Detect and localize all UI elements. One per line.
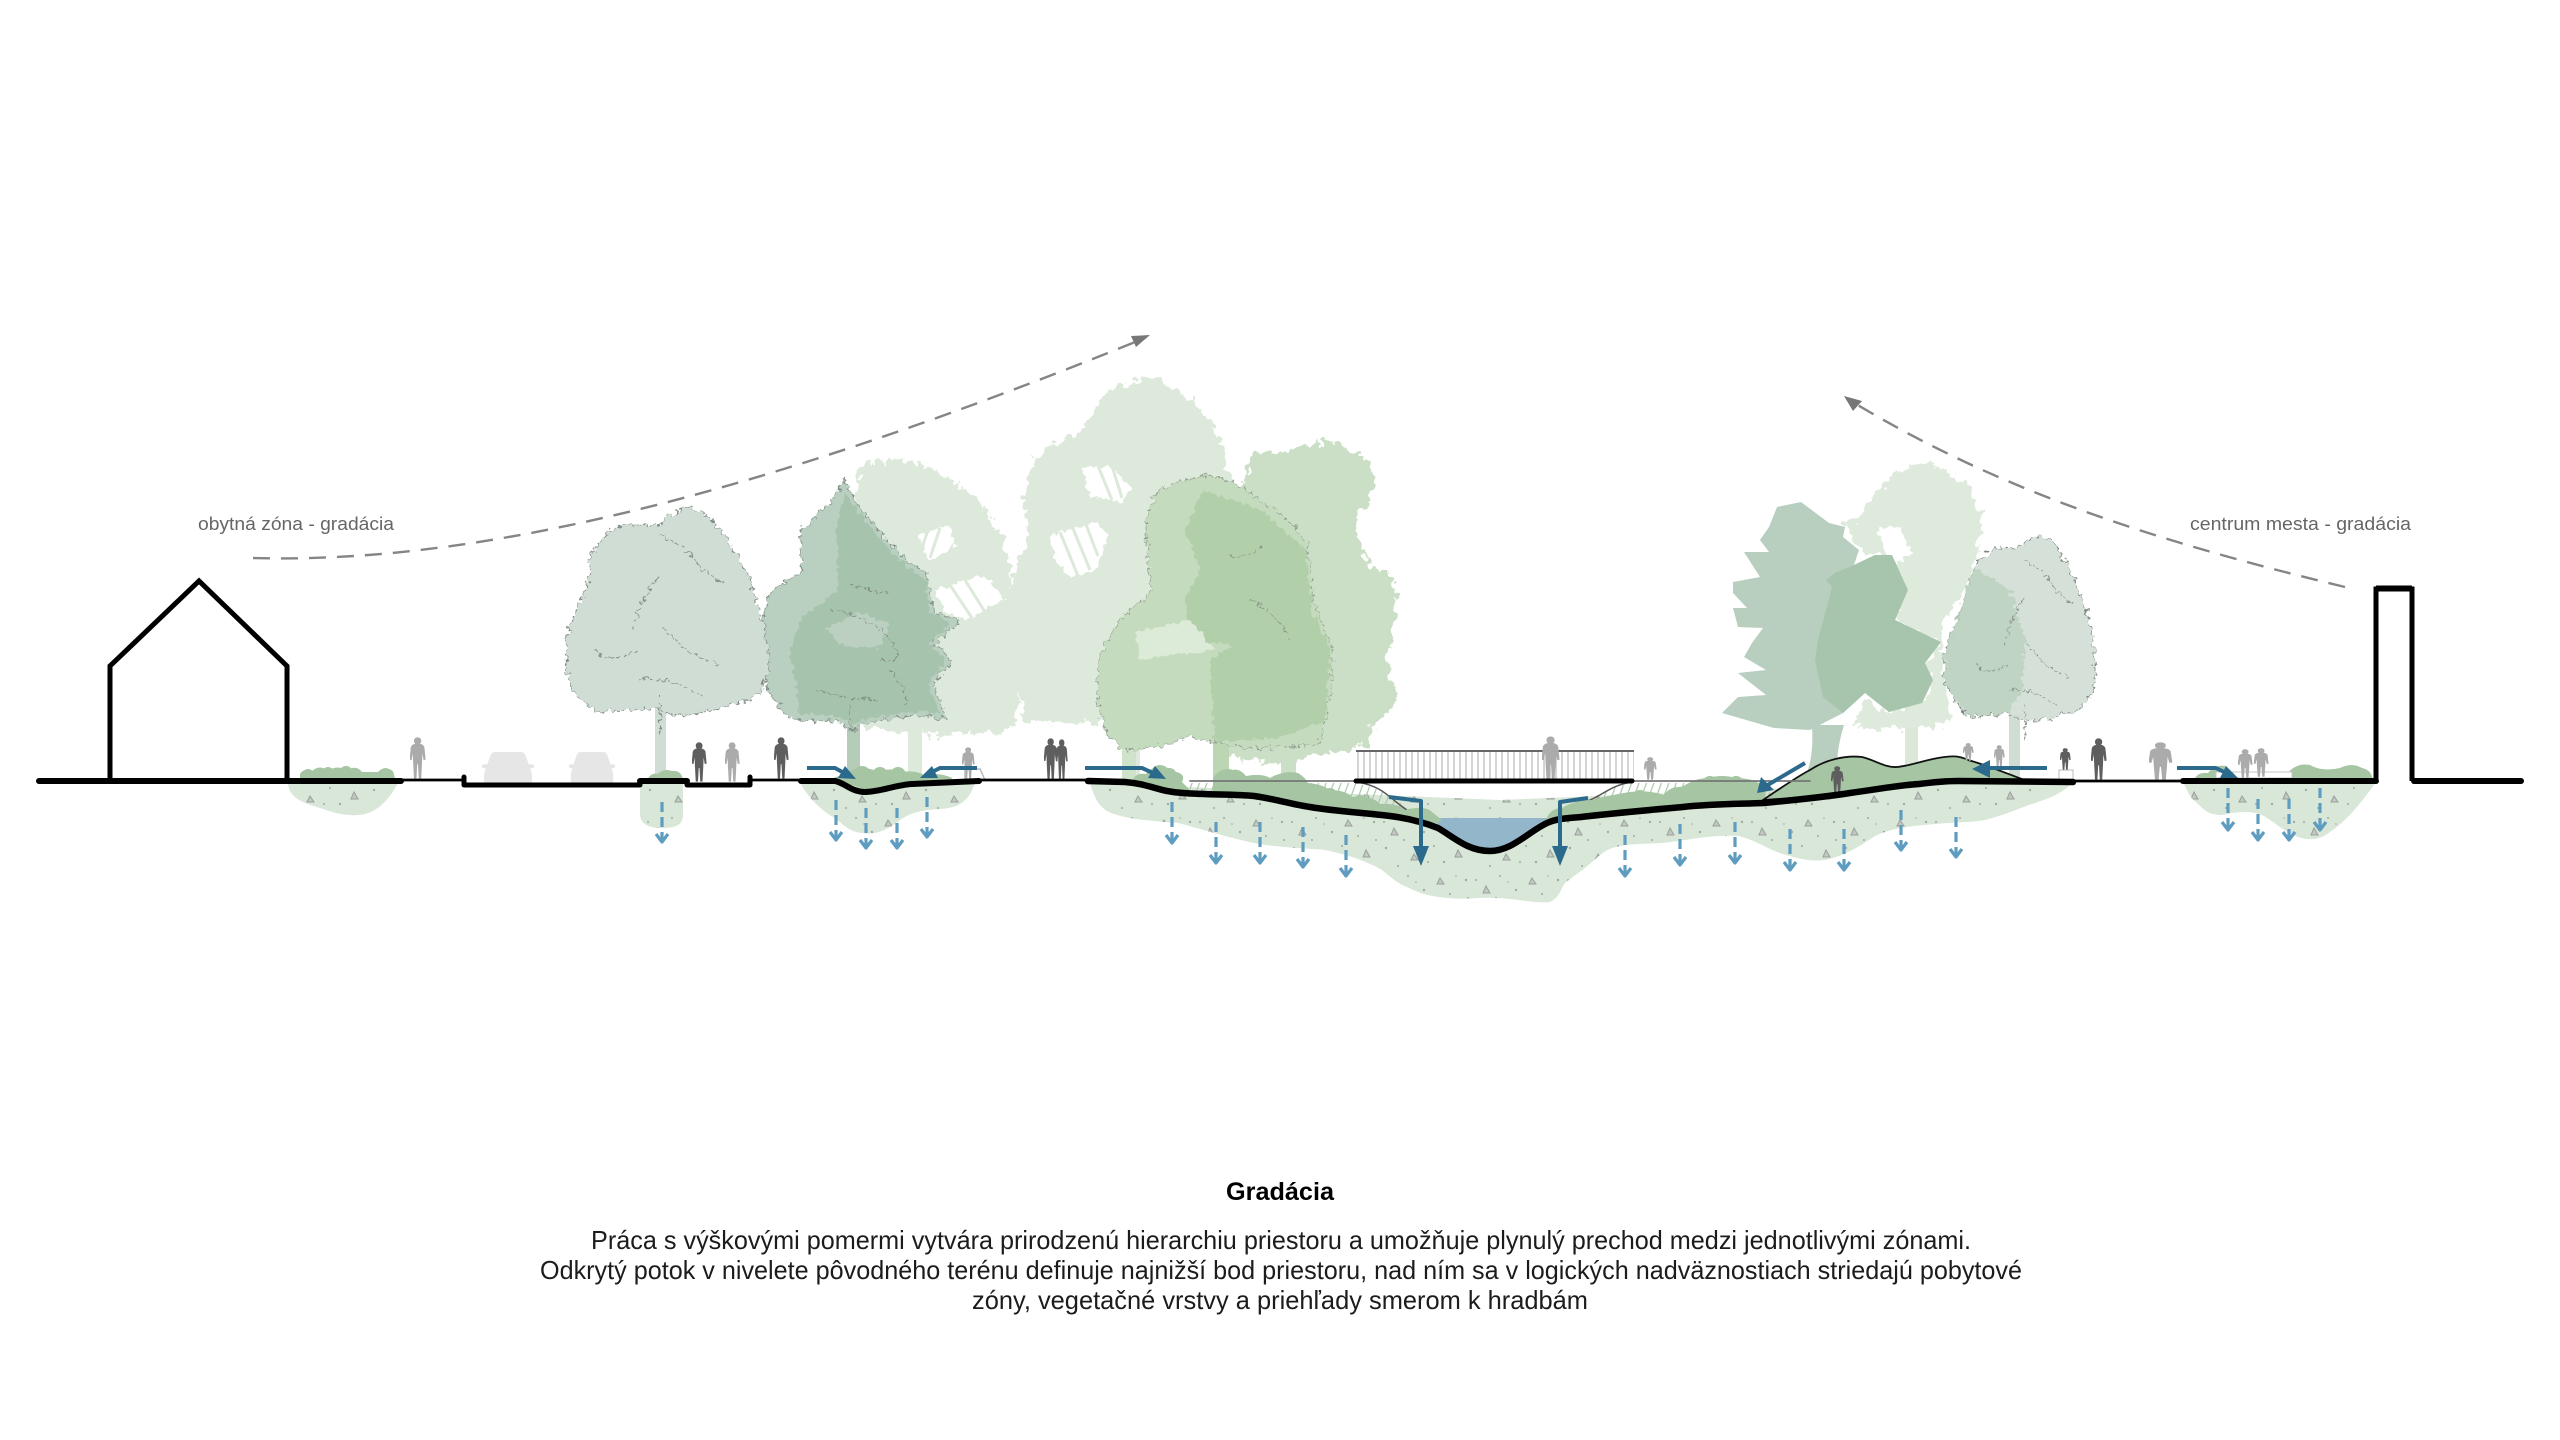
heading: Gradácia [1226,1178,1335,1206]
tree: front scalloped green tree [1097,475,1332,781]
body text [540,1225,2022,1315]
tree: light back tree behind conifer [850,459,1020,781]
house outline [110,581,287,781]
tree: street tree left [566,508,769,781]
stream water [1436,818,1548,851]
infiltration arrows [656,788,2326,876]
body text: Odkrytý potok v nivelete pôvodného terénu definuje najnižší bod priestoru, nad ním sa v logických nadväznostiach striedajú pobytové [540,1255,2022,1285]
city wall outline [2376,589,2412,781]
tree: grey-green conifer [764,480,959,781]
ground line [39,777,2521,851]
soil texture: gravel and pebbles [288,781,2376,902]
cars [482,752,615,783]
people: dark figures [692,737,2107,794]
plinth and bench [2059,770,2292,780]
vegetation: hedges and bushes [300,764,2373,826]
tree: darker crown part of maple [1815,555,1941,713]
soil: swale [800,782,975,834]
gradient arc left [253,335,1150,558]
tree: maple-like grey-green tree right [1722,502,1941,775]
tree: light back tree right [1845,463,1982,770]
hatched bank fill [1190,783,1770,815]
bench chair [965,769,985,780]
bridge banks [1356,782,1632,812]
soil: under hedge left [288,783,398,815]
tree: street tree right [1944,535,2095,781]
bridge railing [1356,751,1634,781]
surface runoff arrows [807,760,2238,866]
tree: light tall back tree [1012,378,1260,780]
soil: tree planter [640,783,683,828]
earth mound [1763,756,2030,800]
label: residential zone: obytná zóna - gradácia [198,514,395,534]
body text: Práca s výškovými pomermi vytvára prirodzenú hierarchiu priestoru a umožňuje plynulý prechod medzi jednotlivými zónami. [591,1225,1971,1255]
soil: hedge right [2183,782,2376,839]
tree: darker back right tree [1200,441,1397,781]
gradient arc right [1844,396,2345,587]
label: city centre: centrum mesta - gradácia [2190,514,2412,534]
people: light figures [410,736,2269,782]
soil: large stream corridor [1090,781,2073,902]
tree holes: gaps in the light crowns [918,466,1132,620]
body text: zóny, vegetačné vrstvy a priehľady smerom k hradbám [972,1285,1588,1315]
